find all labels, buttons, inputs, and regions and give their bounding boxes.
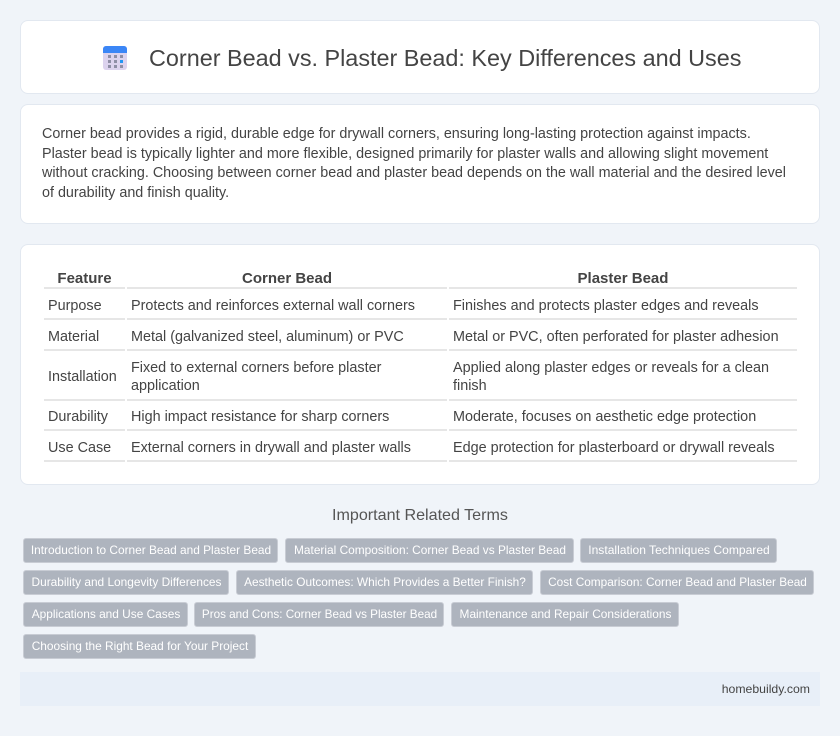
row: purpose: Protects and reinforces external wall corners — [131, 298, 415, 314]
table header: Feature — [57, 270, 112, 287]
related terms tags: Pros and Cons: Corner Bead vs Plaster Bead — [202, 608, 437, 621]
header card — [20, 20, 820, 94]
row: use case: Use Case — [48, 440, 111, 456]
row: material: Metal (galvanized steel, aluminum) or PVC — [131, 329, 404, 345]
table header: Plaster Bead — [578, 270, 668, 287]
title: Corner Bead vs. Plaster Bead: Key Differences and Uses — [149, 45, 741, 71]
row: installation — [44, 360, 797, 401]
row: purpose: Purpose — [48, 298, 102, 314]
comparison table panel — [20, 244, 820, 485]
intro paragraph — [42, 126, 786, 201]
related terms heading: Important Related Terms — [332, 506, 508, 524]
related terms tags: Durability and Longevity Differences — [32, 575, 221, 589]
intro text panel — [20, 104, 820, 224]
row: use case: Edge protection for plasterboard or drywall reveals — [453, 440, 775, 456]
related terms tags: Aesthetic Outcomes: Which Provides a Better Finish? — [244, 575, 526, 589]
row: installation: Applied along plaster edges or reveals for a clean — [453, 360, 769, 376]
footer bar — [20, 672, 820, 706]
related terms tags: Material Composition: Corner Bead vs Plaster Bead — [294, 543, 566, 557]
table header — [44, 270, 797, 289]
row: durability — [44, 409, 797, 431]
row: durability: High impact resistance for sharp corners — [131, 409, 389, 425]
row: installation: application — [131, 378, 200, 394]
footer site name: homebuildy.com — [722, 682, 810, 696]
row: installation: finish — [453, 378, 487, 394]
row: durability: Moderate, focuses on aesthetic edge protection — [453, 409, 756, 425]
row: durability: Durability — [48, 409, 108, 425]
related terms tags — [23, 538, 814, 659]
related terms tags: Maintenance and Repair Considerations — [460, 607, 671, 621]
related terms tags: Cost Comparison: Corner Bead and Plaster Bead — [548, 575, 807, 589]
intro paragraph: Corner bead provides a rigid, durable edge for drywall corners, ensuring long-lasting protection against impacts. — [42, 126, 751, 142]
row: use case: External corners in drywall and plaster walls — [131, 440, 411, 456]
intro paragraph: of durability and finish quality. — [42, 185, 229, 201]
row: installation: Installation — [48, 369, 117, 385]
related terms tags: Installation Techniques Compared — [588, 543, 770, 557]
icon: calendar — [103, 46, 127, 70]
table header: Corner Bead — [242, 270, 332, 287]
row: material: Metal or PVC, often perforated for plaster adhesion — [453, 329, 779, 345]
row: purpose — [44, 298, 797, 320]
intro paragraph: without cracking. Choosing between corner bead and plaster bead depends on the wall material and the desired level — [42, 165, 786, 181]
intro paragraph: Plaster bead is typically lighter and more flexible, designed primarily for plaster walls and allowing slight movement — [42, 146, 768, 162]
related terms tags: Introduction to Corner Bead and Plaster Bead — [31, 543, 271, 557]
related terms tags: Choosing the Right Bead for Your Project — [32, 639, 248, 653]
row: material — [44, 329, 797, 351]
row: material: Material — [48, 329, 99, 345]
related terms tags: Applications and Use Cases — [32, 607, 180, 621]
row: purpose: Finishes and protects plaster edges and reveals — [453, 298, 759, 314]
row: use case — [44, 440, 797, 462]
row: installation: Fixed to external corners before plaster — [131, 360, 381, 376]
